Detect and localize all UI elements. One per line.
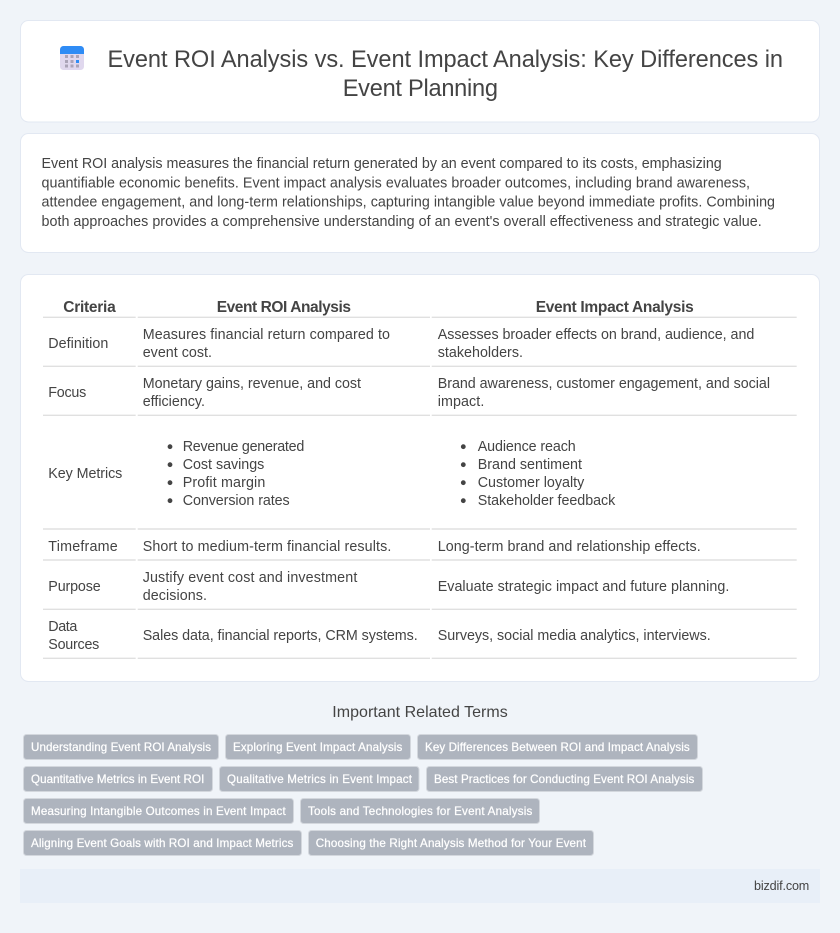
row: definition: Assesses broader effects on brand, audience, and [438, 327, 754, 343]
panel: comparison table [20, 274, 820, 682]
tag row 2: Best Practices for Conducting Event ROI Analysis [434, 773, 695, 786]
tag row 2 [24, 766, 702, 792]
related term tags [24, 734, 702, 856]
panel: introduction text: Event ROI analysis measures the financial return generated by an event compared to its costs, emphasizing [42, 156, 722, 172]
heading: important related terms: Important Related Terms [332, 704, 508, 721]
panel: introduction text: both approaches provides a comprehensive understanding of an event's overall effectiveness and strategic value. [42, 214, 762, 230]
tag row 4: Choosing the Right Analysis Method for Your Event [316, 837, 587, 850]
row: focus: efficiency. [143, 394, 205, 410]
title: Event Planning [343, 76, 498, 102]
row: data sources: Sales data, financial reports, CRM systems. [143, 628, 418, 644]
tag row 2: Qualitative Metrics in Event Impact [227, 773, 413, 786]
row: key metrics [43, 439, 797, 529]
footer: bizdif.com [754, 879, 809, 893]
row: timeframe: Timeframe [48, 539, 118, 555]
list: ROI metrics [168, 439, 304, 509]
row: data sources: Sources [48, 637, 99, 653]
tag row 1: Exploring Event Impact Analysis [233, 741, 403, 754]
tag row 1: Understanding Event ROI Analysis [31, 741, 211, 754]
row: purpose: Justify event cost and investment [143, 570, 357, 586]
row: data sources: Surveys, social media analytics, interviews. [438, 628, 711, 644]
tag row 3: Measuring Intangible Outcomes in Event Impact [31, 805, 286, 818]
list: ROI metrics: Conversion rates [183, 493, 290, 509]
footer [20, 869, 820, 903]
list: impact metrics: Brand sentiment [478, 457, 582, 473]
row: focus: Focus [48, 385, 86, 401]
tag row 4 [24, 830, 594, 856]
tag row 3: Tools and Technologies for Event Analysis [308, 805, 533, 818]
table header row: Criteria [63, 299, 116, 316]
table header row: Event Impact Analysis [536, 299, 694, 316]
list: ROI metrics: Cost savings [183, 457, 264, 473]
row: definition: Measures financial return compared to [143, 327, 390, 343]
row: focus [43, 376, 797, 415]
row: timeframe: Long-term brand and relationship effects. [438, 539, 701, 555]
tag row 3 [24, 798, 540, 824]
list: ROI metrics: Profit margin [183, 475, 265, 491]
row: timeframe [43, 539, 797, 560]
row: definition: event cost. [143, 345, 212, 361]
list: impact metrics [461, 439, 616, 509]
table header row: Event ROI Analysis [217, 299, 351, 316]
tag row 4: Aligning Event Goals with ROI and Impact Metrics [31, 837, 294, 850]
list: impact metrics: Audience reach [478, 439, 576, 455]
row: definition: stakeholders. [438, 345, 523, 361]
title: Event ROI Analysis vs. Event Impact Analysis: Key Differences in [108, 47, 783, 73]
tag row 1: Key Differences Between ROI and Impact Analysis [425, 741, 690, 754]
row: definition: Definition [48, 336, 108, 352]
row: definition [43, 327, 797, 366]
list: ROI metrics: Revenue generated [183, 439, 304, 455]
list: impact metrics: Stakeholder feedback [478, 493, 616, 509]
panel: introduction text: quantifiable economic benefits. Event impact analysis evaluates broader outcomes, including brand awareness, [42, 175, 750, 191]
row: purpose: Purpose [48, 579, 101, 595]
list: impact metrics: Customer loyalty [478, 475, 585, 491]
table header row [43, 299, 797, 317]
row: purpose: decisions. [143, 588, 207, 604]
title [108, 47, 783, 102]
icon: calendar [60, 46, 84, 70]
row: purpose [43, 570, 797, 609]
row: key metrics: Key Metrics [48, 466, 122, 482]
panel: introduction text [20, 134, 820, 252]
row: focus: impact. [438, 394, 484, 410]
tag row 2: Quantitative Metrics in Event ROI [31, 773, 204, 786]
row: data sources [43, 619, 797, 658]
row: data sources: Data [48, 619, 77, 635]
row: timeframe: Short to medium-term financial results. [143, 539, 391, 555]
row: focus: Monetary gains, revenue, and cost [143, 376, 361, 392]
row: purpose: Evaluate strategic impact and future planning. [438, 579, 729, 595]
panel: title header [20, 20, 820, 122]
panel: introduction text: attendee engagement, and long-term relationships, capturing intangible value beyond immediate profits. Combining [42, 195, 775, 211]
row: focus: Brand awareness, customer engagement, and social [438, 376, 770, 392]
tag row 1 [24, 734, 698, 760]
